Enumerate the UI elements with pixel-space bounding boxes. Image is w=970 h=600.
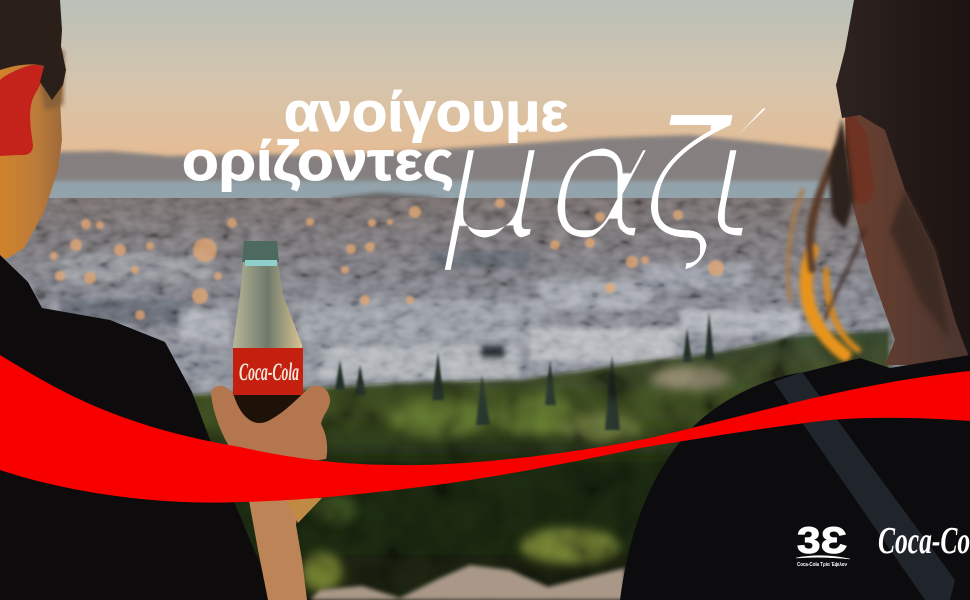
large word: μαζί <box>439 85 776 277</box>
left person <box>0 0 322 600</box>
red label <box>233 348 303 395</box>
bag strap <box>774 372 955 600</box>
city lights bokeh <box>50 198 724 320</box>
mountains and sea <box>45 135 835 208</box>
sky background <box>0 0 970 200</box>
headline <box>182 80 776 277</box>
city panorama <box>0 198 970 430</box>
tree texture <box>190 330 890 600</box>
logo: Coca-Cola 3E: Coca-Cola Τρία Έψιλον <box>797 562 847 568</box>
face and neck <box>0 40 64 258</box>
headline line 2: ορίζοντες <box>182 129 454 192</box>
rock in the foreground <box>310 565 625 600</box>
bottle of Coca-Cola <box>233 241 303 428</box>
ear <box>845 114 874 204</box>
hillside trees <box>190 312 890 600</box>
label wordmark: Coca-Cola <box>239 359 299 386</box>
wrist under the ribbon <box>285 498 322 523</box>
dark hair <box>836 0 970 360</box>
red ribbon <box>0 355 970 503</box>
golden hair strands <box>788 150 864 355</box>
headline line 1: ανοίγουμε <box>284 80 568 143</box>
hair <box>0 0 66 100</box>
neck and jaw <box>845 110 970 365</box>
black shirt <box>0 255 275 600</box>
black shirt <box>620 355 970 600</box>
logo: Coca-Cola 3E <box>796 520 850 568</box>
dark cola <box>233 394 302 428</box>
bottle cap rim <box>242 241 279 262</box>
city texture <box>0 198 970 430</box>
logo: Coca-Cola 3E: 3Ɛ <box>797 520 847 561</box>
forearm <box>248 495 307 600</box>
ear <box>0 65 44 156</box>
right person <box>620 0 970 600</box>
hand holding bottle <box>211 386 330 470</box>
